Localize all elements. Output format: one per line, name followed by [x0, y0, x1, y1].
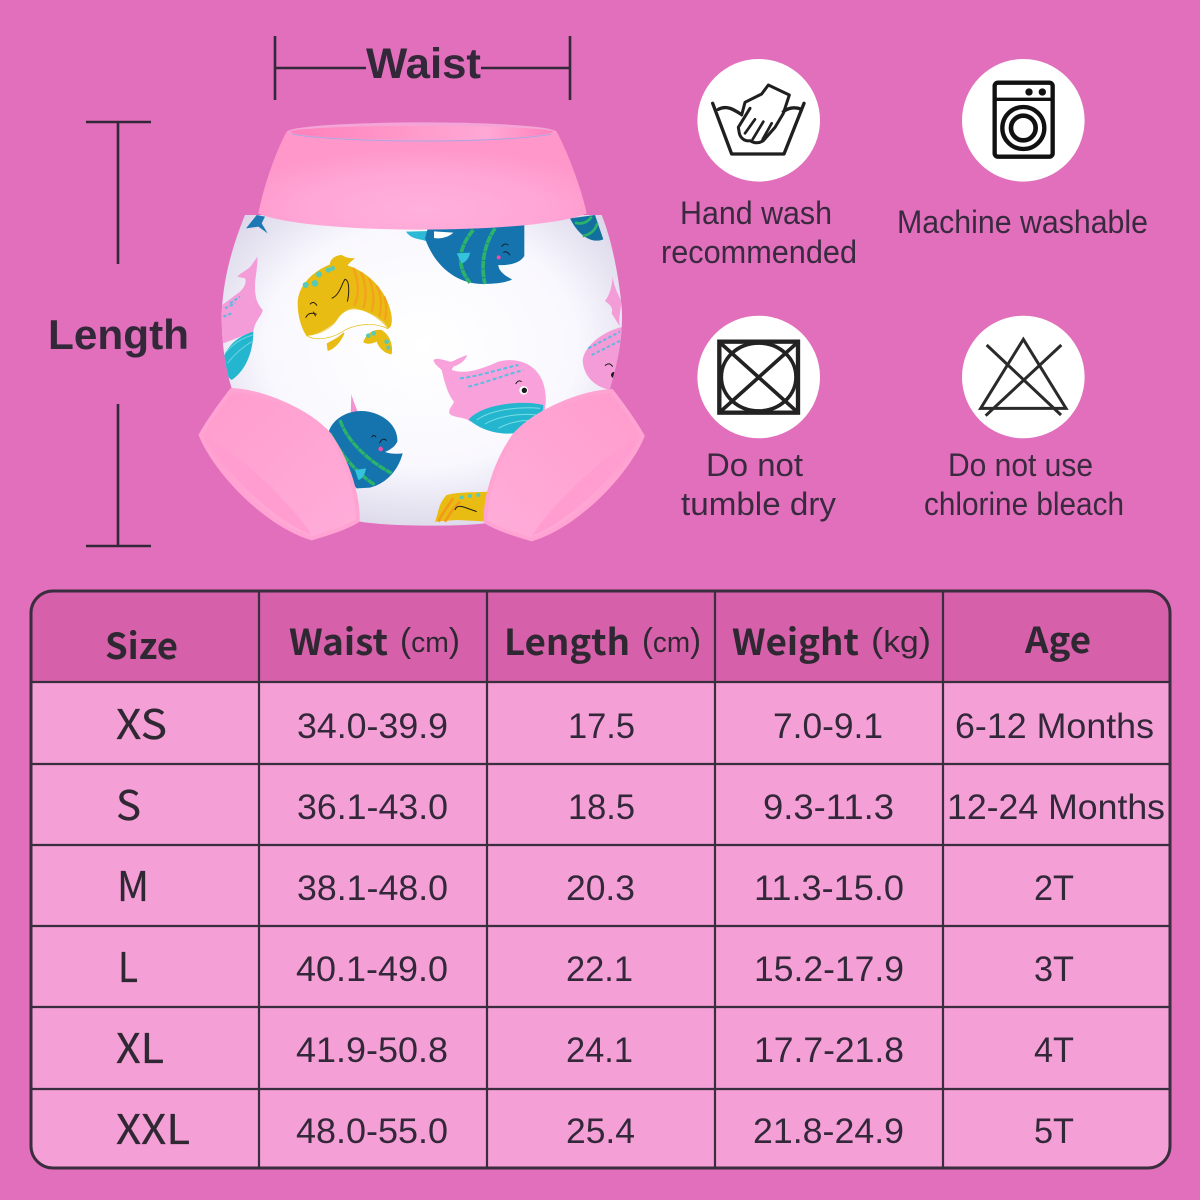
top left whale scrap: [246, 215, 268, 233]
row XXL: XXL: [116, 1096, 190, 1156]
row XS: 17.5: [568, 706, 635, 746]
row M: 20.3: [566, 868, 635, 908]
row XXL: 21.8-24.9: [753, 1111, 904, 1151]
row S: S: [116, 772, 141, 832]
narwhal: [328, 394, 403, 488]
care label: do not tumble dry: Do not: [706, 447, 803, 483]
row XXL: 48.0-55.0: [296, 1111, 448, 1151]
row XL: 41.9-50.8: [296, 1030, 448, 1070]
table outline: [31, 591, 1170, 1168]
care label: machine washable: Machine washable: [897, 204, 1148, 240]
waist dimension: Waist: [366, 40, 481, 88]
row XL: XL: [116, 1015, 164, 1075]
table header text: Age: [1024, 612, 1091, 664]
bottom yellow whale: [435, 492, 490, 522]
right pink whale: [582, 277, 622, 390]
row XXL: [116, 1096, 1074, 1156]
top right whale scrap: [570, 215, 603, 241]
row XL: 4T: [1034, 1030, 1074, 1070]
care icon: washing machine: [962, 59, 1085, 182]
care icon: do not tumble dry: [697, 316, 820, 438]
row L: 40.1-49.0: [296, 949, 448, 989]
row XL: [116, 1015, 1074, 1075]
table body background: [31, 682, 1170, 1168]
row S: [116, 772, 1165, 832]
row XS: 6-12 Months: [955, 706, 1154, 746]
pink whale: [433, 355, 546, 434]
row S: 9.3-11.3: [763, 787, 894, 827]
waistband: [258, 122, 587, 230]
table header text: [105, 612, 1091, 670]
row S: 18.5: [568, 787, 635, 827]
row M: 38.1-48.0: [297, 868, 448, 908]
care label: do not use chlorine bleach: chlorine bleach: [924, 486, 1124, 522]
row XXL: 25.4: [566, 1111, 635, 1151]
table header text: (cm): [400, 622, 460, 660]
length dimension: Length: [48, 311, 189, 358]
left pink whale: [220, 257, 263, 380]
care label: do not tumble dry: [681, 447, 836, 522]
size table: [31, 591, 1170, 1168]
row M: 11.3-15.0: [754, 868, 904, 908]
table header text: Size: [105, 618, 178, 670]
care icon: hand wash: [697, 59, 820, 182]
row XS: XS: [116, 691, 167, 751]
yellow whale: [298, 255, 392, 354]
care label: hand wash: [661, 195, 857, 270]
diaper body: [222, 215, 622, 526]
right leg cuff: [486, 391, 643, 539]
row XL: 17.7-21.8: [754, 1030, 904, 1070]
care label: do not use chlorine bleach: [924, 447, 1124, 522]
row XS: 7.0-9.1: [773, 706, 883, 746]
row XL: 24.1: [566, 1030, 633, 1070]
row M: [117, 853, 1074, 913]
row M: M: [117, 853, 149, 913]
table header text: Weight: [732, 614, 859, 666]
row S: 36.1-43.0: [297, 787, 448, 827]
row XXL: 5T: [1034, 1111, 1074, 1151]
row L: [118, 934, 1074, 994]
whale pattern: [220, 215, 627, 522]
row XS: 34.0-39.9: [297, 706, 448, 746]
care label: do not tumble dry: tumble dry: [681, 486, 836, 522]
waist dimension: [275, 36, 570, 100]
length dimension: [48, 122, 189, 546]
table header text: Waist: [289, 614, 388, 666]
table header text: Length: [504, 614, 630, 666]
row L: L: [118, 934, 138, 994]
row L: 15.2-17.9: [754, 949, 904, 989]
care label: do not use chlorine bleach: Do not use: [948, 447, 1093, 483]
row M: 2T: [1034, 868, 1074, 908]
row S: 12-24 Months: [947, 787, 1165, 827]
row XS: [116, 691, 1154, 751]
care icon: do not use chlorine bleach: [962, 316, 1085, 438]
table header background: [31, 591, 1170, 682]
top blue whale: [406, 220, 524, 284]
care label: hand wash: recommended: [661, 234, 857, 270]
care label: hand wash: Hand wash: [680, 195, 832, 231]
swim diaper illustration: [201, 122, 643, 539]
table header text: (kg): [871, 622, 931, 660]
table header text: (cm): [642, 622, 701, 660]
left leg cuff: [201, 390, 358, 538]
row L: 3T: [1034, 949, 1074, 989]
row L: 22.1: [566, 949, 633, 989]
